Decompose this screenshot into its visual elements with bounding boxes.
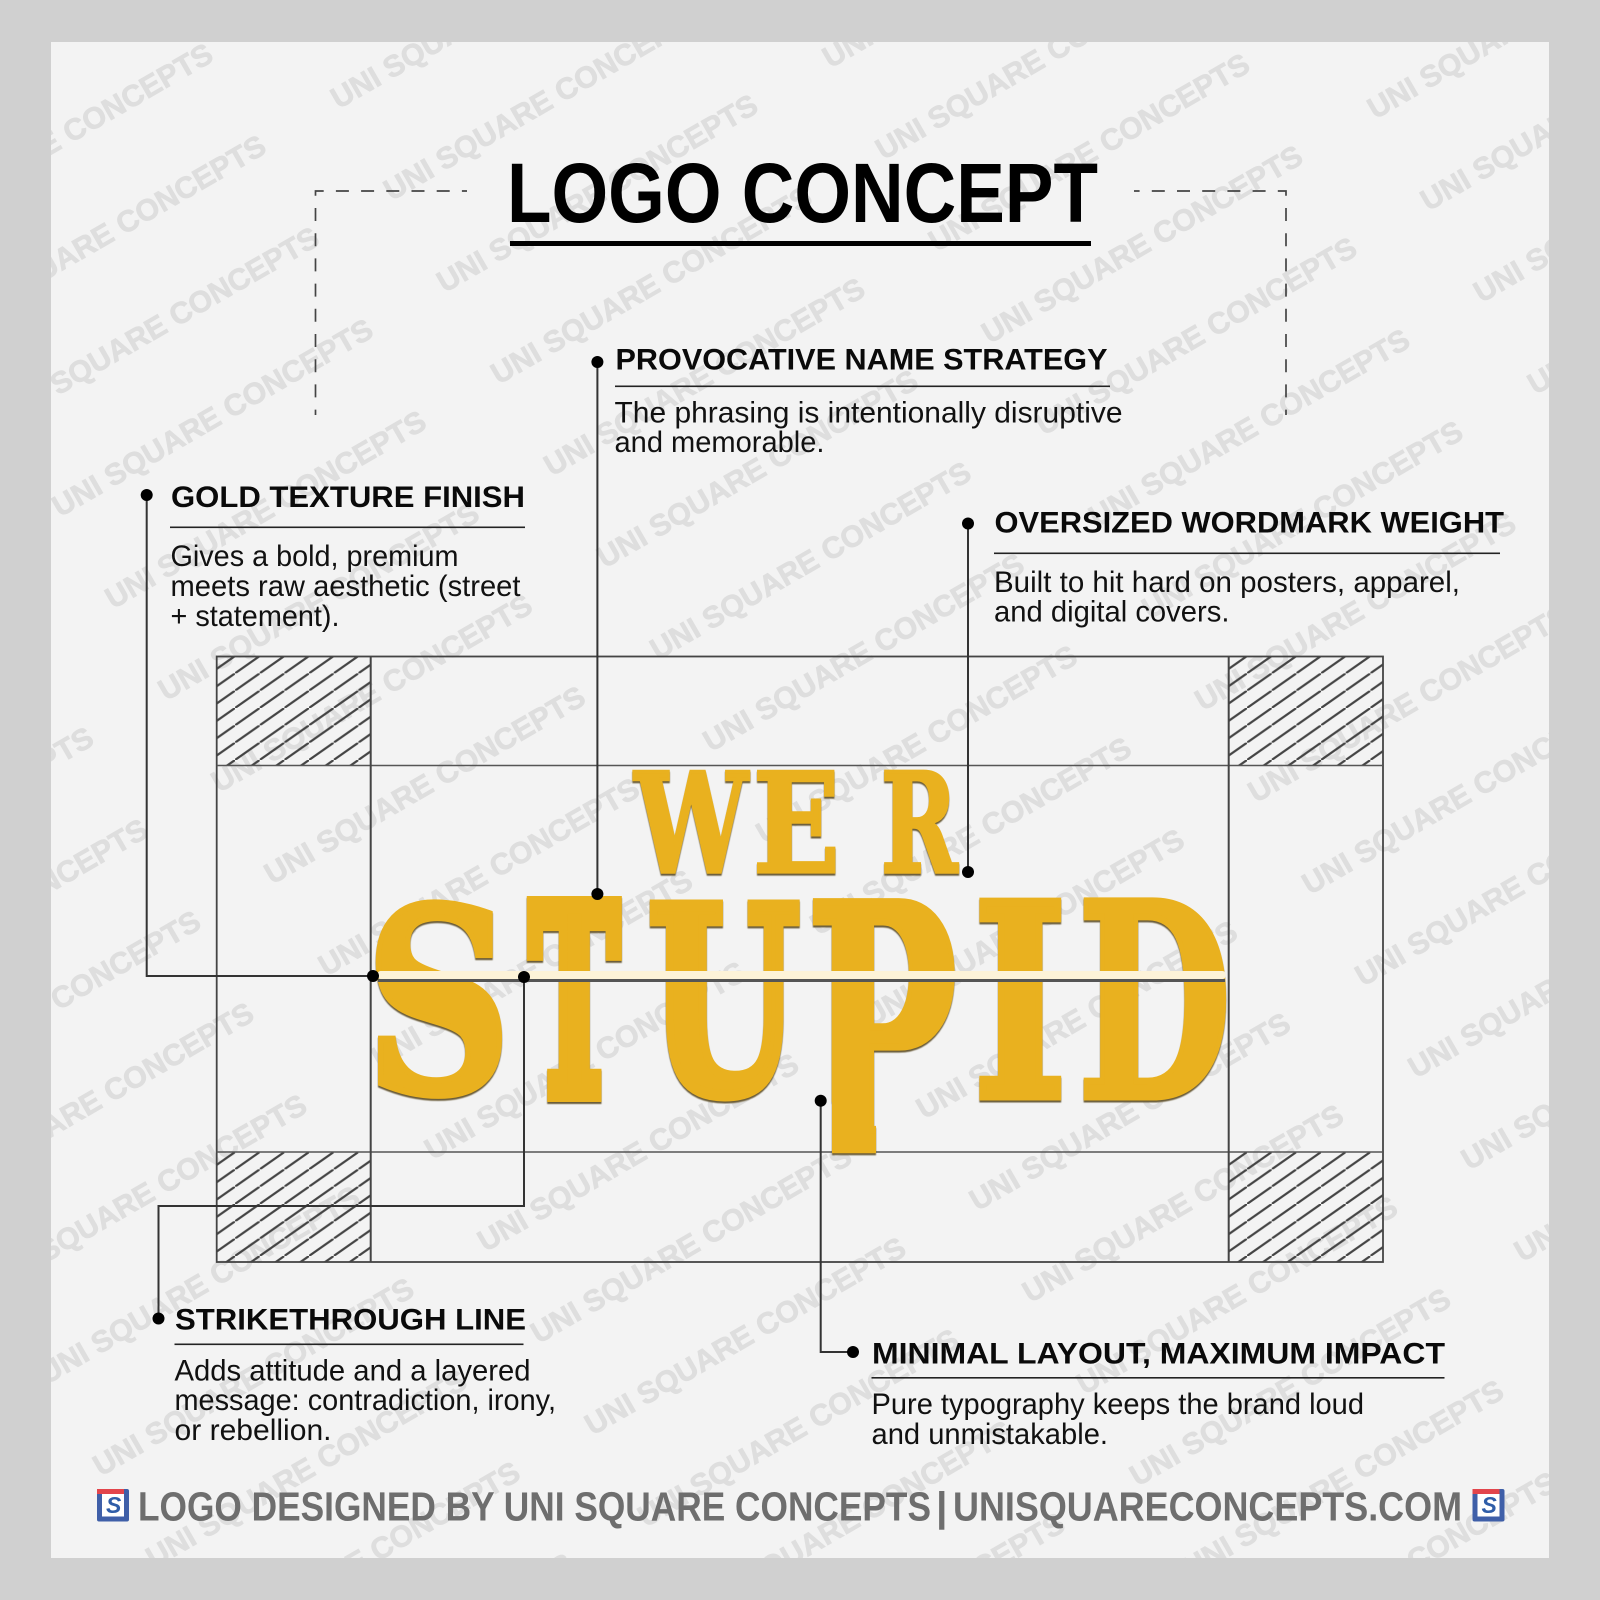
callout: minimal layout, maximum impact: [815, 1095, 1445, 1451]
watermark pattern: UNI SQUARE CONCEPTS: [579, 1231, 912, 1442]
watermark pattern: UNI SQUARE CONCEPTS: [486, 180, 818, 391]
callout: strikethrough line: or rebellion.: [174, 1414, 332, 1447]
title: LOGO CONCEPT: [507, 146, 1098, 240]
watermark pattern: UNI SQUARE CONCEPTS: [1137, 415, 1469, 626]
callout: strikethrough line: STRIKETHROUGH LINE: [175, 1304, 526, 1336]
watermark pattern: UNI SQUARE CONCEPTS: [1177, 1374, 1510, 1585]
watermark pattern: UNI SQUARE CONCEPTS: [1017, 1099, 1349, 1309]
callout: gold texture finish: [141, 481, 525, 982]
watermark pattern: UNI SQUARE CONCEPTS: [525, 1139, 858, 1350]
watermark pattern: UNI SQUARE CONCEPTS: [964, 1007, 1296, 1218]
watermark pattern: UNI SQUARE CONCEPTS: [47, 313, 379, 524]
watermark pattern: UNI SQUARE CONCEPTS: [1243, 599, 1575, 809]
logo wordmark: WE R STUPID: [375, 770, 1227, 1156]
watermark pattern: UNI SQUARE CONCEPTS: [419, 956, 751, 1167]
footer credit: UNISQUARECONCEPTS.COM: [953, 1484, 1462, 1530]
watermark pattern: UNI SQUARE CONCEPTS: [313, 772, 645, 983]
watermark pattern: UNI SQUARE CONCEPTS: [632, 1323, 965, 1534]
logo wordmark: WE R STUPID: S: [365, 854, 512, 1153]
watermark pattern: UNI SQUARE CONCEPTS: [751, 639, 1083, 850]
callout: minimal layout, maximum impact: MINIMAL LAYOUT, MAXIMUM IMPACT: [872, 1338, 1445, 1370]
watermark pattern: UNI SQUARE CONCEPTS: [34, 1180, 366, 1391]
watermark pattern: UNI SQUARE CONCEPTS: [0, 221, 325, 432]
strikethrough line: [378, 971, 1226, 982]
title bracket: left dashed: [316, 191, 467, 415]
watermark pattern: UNI SQUARE CONCEPTS: [592, 364, 924, 575]
watermark pattern: TS: [529, 1548, 579, 1595]
watermark pattern: UNI SQUARE CONCEPTS: [378, 0, 711, 207]
watermark pattern: ARE CONCEPTS: [302, 1456, 526, 1600]
logo wordmark: WE R STUPID: D: [1078, 844, 1231, 1161]
callout: oversized wordmark weight: Built to hit hard on posters, apparel,: [994, 566, 1460, 599]
callout: gold texture finish: Gives a bold, premium: [170, 540, 458, 573]
logo wordmark: WE R STUPID: P: [806, 830, 957, 1230]
watermark pattern: UNI SQUARE CONCEPTS: [141, 1364, 473, 1575]
callout: provocative name strategy: and memorable.: [614, 426, 824, 459]
icon: left square S logo: [97, 1489, 129, 1522]
callout: gold texture finish: GOLD TEXTURE FINISH: [171, 481, 525, 514]
watermark pattern: NCEPTS: [949, 1507, 1071, 1596]
watermark pattern: E CONCEPTS: [1377, 1466, 1563, 1592]
watermark pattern: UNI SQUARE CONCEPTS: [805, 731, 1137, 942]
watermark pattern: UNI SQUARE CONCEPTS: [1071, 1190, 1403, 1401]
watermark pattern: UNI SQUARE CONCEPTS: [923, 48, 1255, 258]
footer credit: |: [936, 1484, 947, 1530]
icon: right square S logo: S: [1482, 1492, 1498, 1518]
callout: gold texture finish: + statement).: [170, 600, 340, 633]
callout: provocative name strategy: [591, 344, 1122, 900]
title bracket: right dashed: [1134, 191, 1286, 415]
watermark pattern: UNI SQUARE CONCEPTS: [366, 864, 698, 1075]
callout: minimal layout, maximum impact: Pure typography keeps the brand loud: [872, 1388, 1364, 1421]
logo wordmark: WE R STUPID: W: [633, 742, 750, 905]
watermark pattern: UNI SQUARE CONCEPTS: [431, 88, 764, 299]
construction grid frame: [217, 656, 1383, 1262]
logo wordmark: WE R STUPID: T: [530, 852, 619, 1155]
watermark pattern: UNI SQUARE CONCEPTS: [1190, 507, 1522, 718]
watermark pattern: UNI SQUARE CONCEPTS: [911, 915, 1243, 1126]
watermark pattern: UNI SQUARE CONCEPTS: [100, 405, 432, 616]
callout: oversized wordmark weight: [962, 506, 1504, 878]
watermark pattern: UNI SQUARE CONCEPTS: [858, 823, 1190, 1034]
logo wordmark: WE R STUPID: U: [648, 851, 800, 1153]
watermark pattern: UNI SQUARE CONCEPTS: [259, 680, 591, 891]
callout: gold texture finish: meets raw aesthetic (street: [170, 570, 520, 603]
callout: oversized wordmark weight: and digital covers.: [994, 596, 1230, 628]
logo wordmark: WE R STUPID: I: [973, 847, 1067, 1159]
footer credit: LOGO DESIGNED BY UNI SQUARE CONCEPTS: [138, 1484, 931, 1530]
callout: oversized wordmark weight: OVERSIZED WORDMARK WEIGHT: [994, 506, 1504, 540]
callout: strikethrough line: [152, 971, 556, 1447]
watermark pattern: UNI SQUARE CONCEPTS: [206, 588, 538, 799]
icon: left square S logo: S: [106, 1492, 122, 1518]
callout: strikethrough line: Adds attitude and a layered: [174, 1354, 530, 1388]
callout: provocative name strategy: PROVOCATIVE NAME STRATEGY: [616, 344, 1108, 376]
callout: strikethrough line: message: contradiction, irony,: [174, 1384, 556, 1417]
logo wordmark: WE R STUPID: R: [881, 743, 959, 905]
watermark pattern: UNI SQUARE CONCEPTS: [88, 1272, 420, 1483]
watermark pattern: UNI SQUARE CONCEPTS: [1030, 231, 1363, 442]
callout: minimal layout, maximum impact: and unmistakable.: [872, 1418, 1108, 1451]
watermark pattern: UNI SQUARE CONCEPTS: [1084, 323, 1416, 534]
watermark pattern: UNI SQUARE CONCEPTS: [698, 548, 1030, 758]
icon: right square S logo: [1472, 1489, 1504, 1522]
watermark pattern: UNI SQUARE CONCEPTS: [539, 272, 871, 483]
watermark pattern: UNI SQUARE CONCEPTS: [1124, 1282, 1457, 1493]
watermark pattern: UNI SQUARE CONCEPTS: [472, 1048, 804, 1258]
watermark pattern: SQUARE CONCEPTS: [738, 1415, 1018, 1596]
watermark pattern: UNI SQUARE CONCEPTS: [153, 497, 485, 707]
watermark pattern: UNI SQUARE CONCEPTS: [645, 456, 977, 667]
footer credit: [138, 1484, 1462, 1530]
watermark pattern: UNI SQUARE CONCEPTS: [976, 139, 1309, 350]
logo wordmark: WE R STUPID: E: [753, 742, 840, 905]
callout: provocative name strategy: The phrasing is intentionally disruptive: [614, 396, 1122, 430]
